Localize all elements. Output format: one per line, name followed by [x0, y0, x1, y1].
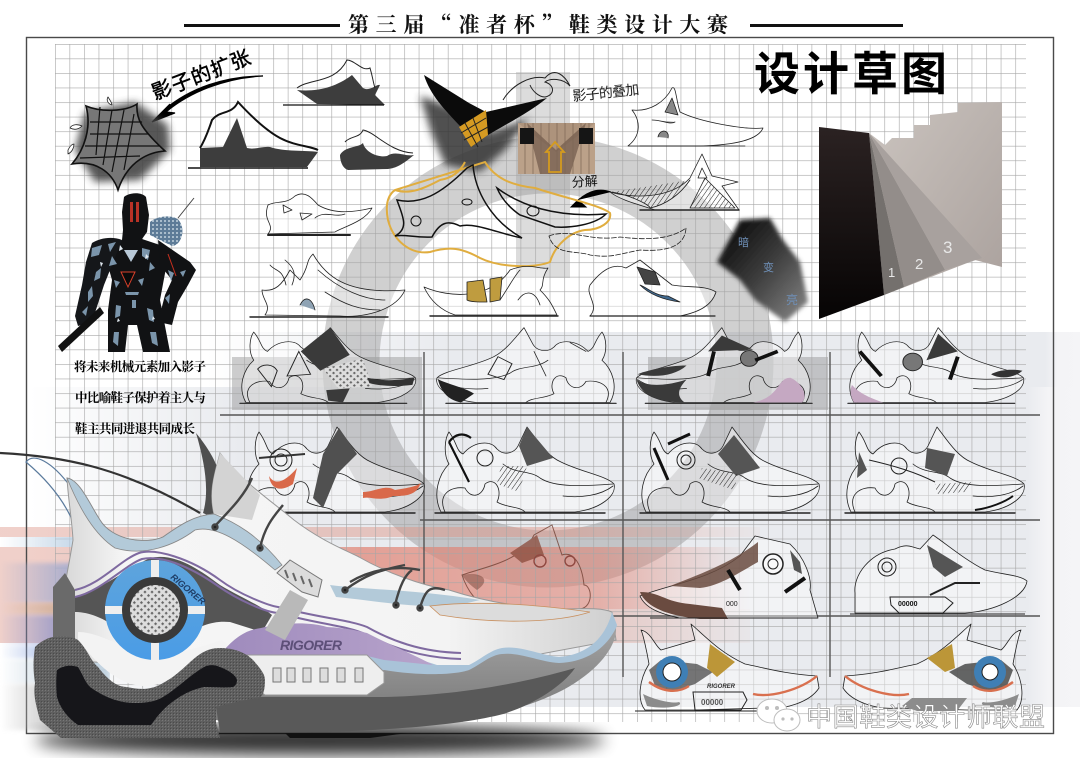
white panel under dial — [78, 632, 232, 686]
sketch row 3 col D — [850, 535, 1027, 614]
shadow study: gradient patch: 暗 — [738, 235, 749, 249]
sketch row 1 col C — [636, 328, 812, 403]
watermark text: 中国鞋类设计师联盟 — [806, 697, 1045, 734]
purple stripes — [75, 552, 461, 659]
text block: concept description — [74, 357, 206, 437]
outsole ground strip — [285, 733, 408, 738]
dial — [105, 560, 208, 660]
sketch row 1 col D — [848, 328, 1024, 403]
sketch row 3 col C — [640, 536, 818, 619]
laces — [212, 478, 445, 610]
photo: shadow arrow on wall — [518, 123, 595, 174]
shadow study: perspective wall — [819, 102, 1002, 319]
large grey ring — [351, 165, 745, 559]
sketch row 2 col C — [640, 427, 819, 513]
sketch row 3 col D: 00000 — [898, 601, 918, 608]
sketch row 4 col C: blue dial shoe: RIGORER — [707, 684, 736, 690]
outsole dark — [216, 668, 575, 732]
lace cord — [0, 453, 200, 513]
light background band lower — [30, 387, 1080, 707]
sketch row 1 col B — [437, 328, 616, 403]
watermark icon: wechat — [757, 699, 800, 731]
arrow: expansion — [152, 76, 263, 122]
rigorer wordmark: RIGORER — [280, 637, 343, 653]
sketch: wave outline shoe — [250, 254, 405, 317]
heel insert black — [56, 665, 237, 725]
grey vertical overlay block — [516, 72, 570, 278]
grey row overlay right — [648, 357, 828, 410]
blue collar strip — [67, 478, 282, 570]
white clip with windows — [241, 655, 384, 695]
sketch row 1 col A — [240, 328, 416, 403]
sketch row 3 col B: red-tinted shoe — [462, 525, 590, 609]
handwritten label: 分解: 分解 — [571, 173, 598, 190]
tongue shading — [212, 453, 260, 520]
sketch row 2 col A — [245, 427, 424, 513]
text block: concept description: 中比喻鞋子保护着主人与 — [75, 388, 206, 406]
sketch row 4 col C: blue dial shoe — [635, 624, 819, 711]
shadow study: gradient patch: 亮 — [786, 292, 798, 307]
sketch: claw outline shoe — [266, 194, 372, 235]
pull tab — [196, 433, 222, 520]
illustration: armored robot — [58, 193, 196, 352]
text block: concept description: 鞋主共同进退共同成长 — [75, 419, 195, 437]
grey row overlay left — [232, 357, 422, 410]
sketch: decomposed shapes with gold outline — [387, 162, 610, 266]
sketch row 2 col B — [435, 427, 614, 513]
icon: expanding star net — [68, 97, 170, 190]
heel counter — [34, 636, 265, 738]
sketch: black wing overlay with shadow — [420, 73, 570, 172]
sketch: silhouette shoe small — [340, 130, 414, 170]
sketch: dashed outline shape — [549, 228, 686, 256]
sketch row 4 col D: blue dial shoe — [843, 624, 1022, 711]
shadow study: perspective wall: 3 — [943, 238, 952, 257]
sketch: silhouette shoe top — [283, 60, 385, 105]
strap — [265, 560, 322, 640]
dial: RIGORER — [169, 572, 208, 607]
arrow: decompose — [571, 190, 611, 207]
shadow study: perspective wall: 2 — [915, 256, 923, 273]
heel collar column — [53, 573, 75, 640]
blue heel loop — [26, 458, 75, 527]
shadow study: gradient patch: 变 — [763, 260, 774, 274]
handwritten label: 影子的叠加: 影子的叠加 — [572, 81, 640, 104]
sketch row 3 col C: 000 — [726, 601, 738, 608]
sketch grid — [55, 44, 1026, 722]
handwritten label: 影子的扩张: 影子的扩张 — [149, 46, 254, 105]
toe mesh — [430, 603, 590, 621]
shadow study: gradient patch — [717, 218, 808, 322]
heading: 设计草图: 设计草图 — [754, 38, 947, 104]
forefoot blue panel — [330, 585, 480, 606]
sketch: manta shape — [628, 88, 763, 146]
motion blur streak behind shoe — [0, 537, 110, 730]
sketch: tent hatch shape — [610, 154, 739, 210]
divider lines of sketch grid — [220, 352, 1040, 677]
shadow study: perspective wall: 1 — [888, 265, 895, 280]
dark eye panel — [75, 557, 272, 642]
title: 第三届“准者杯”鞋类设计大赛 — [348, 9, 730, 39]
sketch: silhouette shoe large — [188, 102, 318, 168]
sketch row 4 col C: blue dial shoe: 00000 — [701, 698, 724, 707]
sketch: shoe with dark square — [589, 260, 716, 316]
shoe upper — [59, 453, 616, 680]
main shoe rendering — [0, 433, 617, 738]
light background band upper — [205, 332, 1080, 387]
title rules — [184, 24, 903, 27]
ground shadow — [35, 725, 605, 755]
sketch: shoe with gold panels — [424, 266, 558, 316]
purple panel — [224, 623, 433, 665]
sketch row 2 col D — [845, 427, 1024, 513]
midsole grey — [216, 628, 616, 732]
red stripes — [0, 527, 760, 643]
midsole side blue line — [240, 612, 617, 682]
text block: concept description: 将未来机械元素加入影子 — [74, 357, 206, 375]
